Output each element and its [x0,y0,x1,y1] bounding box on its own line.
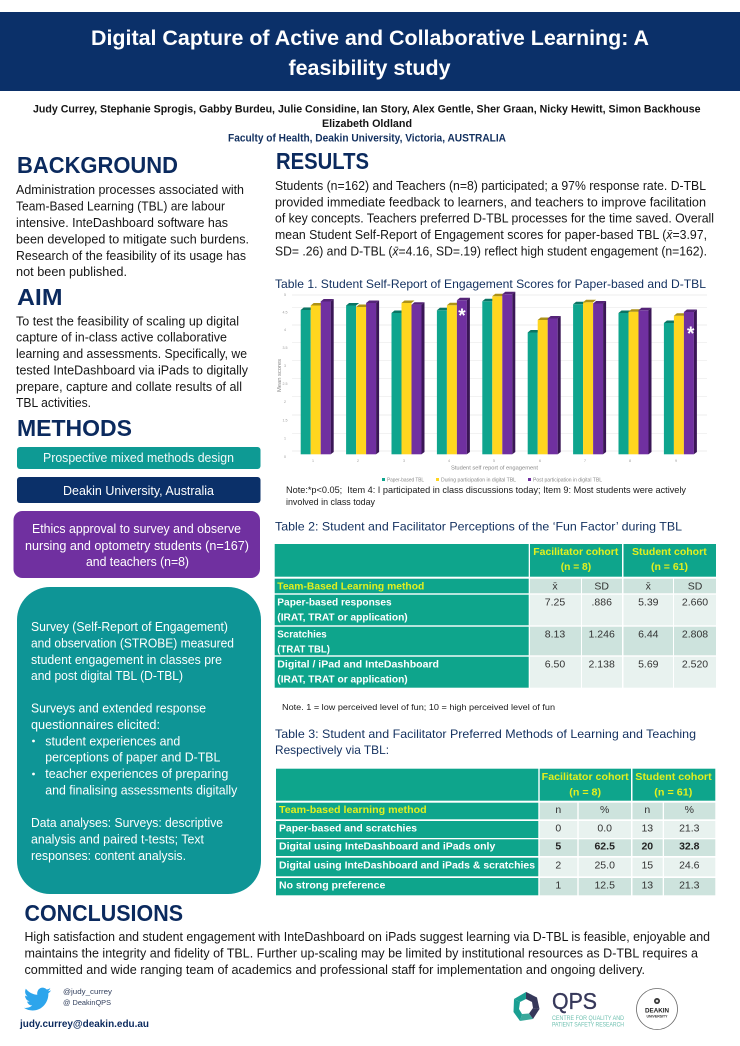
text block: results: provided immediate feedback to learners, and teachers to improve facilitation [275,196,706,210]
table 3 heading [275,727,696,757]
table 2: fun factor: 6.44 [638,629,659,641]
title banner: Digital Capture of Active and Collaborative Learning: A [91,27,649,50]
panel: survey methods: Survey (Self-Report of Engagement) [31,620,228,634]
text block: aim: capture of in-class active collaborative [16,331,227,345]
table 2: fun factor: SD [688,580,703,592]
table 2: fun factor: Scratchies [277,629,327,641]
title banner [0,12,740,91]
bar chart: engagement scores: During participation in digital TBL [441,478,516,484]
bar chart: engagement scores: 7 [584,459,586,463]
bar chart: engagement scores: 6 [539,459,541,463]
text block: conclusions: High satisfaction and student engagement with InteDashboard on iPads suggest learning via D-TBL is feasible, enjoyable and [24,930,710,944]
logo: QPS: PATIENT SAFETY RESEARCH [552,1022,624,1028]
heading: conclusions: CONCLUSIONS [24,900,183,926]
table 3: preferred methods: 12.5 [594,880,615,892]
text block: aim: tested InteDashboard via iPads to digitally [16,364,249,378]
bar chart: engagement scores: 3 [403,459,405,463]
table 2: fun factor: (IRAT, TRAT or application) [277,674,408,686]
panel: survey methods: questionnaires elicited: [31,718,160,732]
chart note: involved in class today [286,497,375,507]
table 3: preferred methods: 25.0 [594,859,615,871]
bar chart: engagement scores: 1 [284,436,286,440]
panel: survey methods: student experiences and [45,734,180,748]
table 2: fun factor: SD [594,580,609,592]
table 2 heading: Table 2: Student and Facilitator Perceptions of the ‘Fun Factor’ during TBL [275,520,682,534]
method box: ethics approval [14,511,260,578]
text block: conclusions: maintains the integrity and fidelity of TBL. Further up-scaling may be limited by institutional resources as D-TBL requires a [24,947,698,961]
method box: ethics approval: and teachers (n=8) [86,555,189,569]
panel: survey methods: Data analyses: Surveys: descriptive [31,816,223,830]
text block: results [275,179,714,258]
bar chart: engagement scores: 4.5 [282,310,288,314]
panel: survey methods: Surveys and extended response [31,702,206,716]
method box: location: Deakin University, Australia [63,484,214,498]
bar chart: engagement scores: 0 [284,455,286,459]
text block: background: Administration processes associated with [16,183,244,197]
table 3: preferred methods: 21.3 [679,822,700,834]
table 3: preferred methods: No strong preference [279,880,385,892]
logo: QPS: CENTRE FOR QUALITY AND [552,1015,624,1022]
bar chart: engagement scores: 4 [448,459,450,463]
table 2: fun factor: 2.808 [682,629,708,641]
table 3: preferred methods: 1 [555,880,561,892]
panel: survey methods: teacher experiences of preparing [45,767,228,781]
text block: results: of key concepts. Teachers preferred D-TBL processes for the time saved. Overall [275,212,714,226]
twitter handles: @ DeakinQPS [63,998,111,1007]
bar chart: engagement scores: * [458,306,466,327]
table 2: fun factor: Facilitator cohort [533,546,619,558]
bar chart: engagement scores: 1 [312,459,314,463]
authors and affiliation: Elizabeth Oldland [322,118,412,130]
table 2: fun factor: Student cohort [632,546,707,558]
method box: ethics approval: nursing and optometry students (n=167) [25,539,249,553]
table 3: preferred methods: 62.5 [594,841,615,853]
table 3: preferred methods: 13 [641,880,653,892]
table 3: preferred methods: 2 [555,859,561,871]
panel: survey methods: and observation (STROBE) measured [31,636,234,650]
table 3: preferred methods: n [555,804,561,816]
heading: background: BACKGROUND [17,152,178,178]
panel: survey methods: and post digital TBL (D-TBL) [31,669,183,683]
bar chart: engagement scores: 4 [284,328,286,332]
logo: Deakin University: DEAKIN [645,1008,669,1014]
table 3: preferred methods [276,769,715,895]
method box: location [17,477,260,503]
table 3: preferred methods: (n = 61) [654,786,692,798]
table 2: fun factor: x̄ [646,580,652,592]
text block: results: mean Student Self-Report of Engagement scores for paper-based TBL (x̄=3.97, [275,228,707,242]
table 3: preferred methods: 5 [555,841,561,853]
table 3: preferred methods: 32.8 [679,841,700,853]
table 3: preferred methods: n [644,804,650,816]
table 2: fun factor: (n = 61) [651,561,688,573]
table 2: fun factor: 2.660 [682,597,708,609]
text block: aim: TBL activities. [16,396,91,410]
text block: conclusions: committed and wide ranging team of academics and professional staff for implementation and ongoing delivery. [24,963,645,977]
table 2: fun factor: 5.39 [638,597,659,609]
panel: survey methods: and finalising assessments digitally [45,783,238,797]
table 2: fun factor: Team-Based Learning method [277,580,424,592]
table 2: fun factor: 7.25 [545,597,565,609]
bar chart: engagement scores: 3.5 [282,346,288,350]
table 3: preferred methods: % [600,804,609,816]
icon: twitter bird [24,988,51,1010]
bar chart: engagement scores: 8 [629,459,631,463]
table 2: fun factor: (n = 8) [561,561,591,573]
text block: background [16,183,249,279]
text block: conclusions [24,930,710,977]
table 3: preferred methods: Digital using InteDashboard and iPads & scratchies [279,859,535,871]
table 3: preferred methods: 13 [641,822,653,834]
bar chart: engagement scores: 2.5 [282,382,288,386]
table 3: preferred methods: 0 [555,822,561,834]
text block: background: Team-Based Learning (TBL) are labour [16,200,225,214]
twitter handles [63,987,112,1007]
text block: background: Research of the feasibility of its usage has [16,249,246,263]
panel: survey methods [17,587,261,894]
bar chart: engagement scores: 2 [357,459,359,463]
bar chart: engagement scores: Mean scores [277,358,283,392]
text block: aim: learning and assessments. Specifically, we [16,347,247,361]
method box: design [17,447,260,469]
method box: ethics approval: Ethics approval to survey and observe [32,522,241,536]
logo: QPS: QPS [552,988,597,1014]
twitter handles: @judy_currey [63,987,112,996]
table 2: fun factor: 6.50 [545,659,565,671]
chart note: Note:*p<0.05; Item 4: I participated in class discussions today; Item 9: Most students were actively [286,485,686,495]
bar chart: engagement scores: 2 [284,400,286,404]
table 2: fun factor: Digital / iPad and InteDashboard [277,659,439,671]
table 3: preferred methods: Student cohort [635,771,712,783]
table 2: fun factor: 1.246 [589,629,615,641]
table 2: fun factor: Paper-based responses [277,597,392,609]
table 2: fun factor: 5.69 [638,659,659,671]
table 1 heading: Table 1. Student Self-Report of Engagement Scores for Paper-based and D-TBL [275,277,706,291]
text block: aim: To test the feasibility of scaling up digital [16,314,239,328]
table 2 note: Note. 1 = low perceived level of fun; 10 = high perceived level of fun [282,702,555,712]
table 3: preferred methods: Paper-based and scratchies [279,822,417,834]
text block: background: been developed to mitigate such burdens. [16,232,249,246]
table 3: preferred methods: (n = 8) [569,786,601,798]
table 2: fun factor: x̄ [552,580,558,592]
table 2: fun factor: (TRAT TBL) [277,644,330,656]
logo: Deakin University [636,988,678,1030]
table 3 heading: Table 3: Student and Facilitator Preferred Methods of Learning and Teaching [275,727,696,741]
table 3: preferred methods: % [685,804,694,816]
title banner: feasibility study [288,57,451,80]
table 2: fun factor: 2.138 [589,659,615,671]
table 2: fun factor: (IRAT, TRAT or application) [277,612,408,624]
text block: aim: prepare, capture and collate results of all [16,380,242,394]
table 2: fun factor: 2.520 [682,659,708,671]
bar chart: engagement scores: Paper-based TBL [387,478,424,484]
table 3: preferred methods: Team-based learning method [279,804,427,816]
text block: results: Students (n=162) and Teachers (n=8) participated; a 97% response rate. D-TBL [275,179,706,193]
logo: QPS [514,988,624,1028]
bar chart: engagement scores: 1.5 [282,418,288,422]
panel: survey methods: perceptions of paper and D-TBL [45,751,220,765]
bar chart: engagement scores: 5 [493,459,495,463]
table 2: fun factor: 8.13 [545,629,565,641]
panel: survey methods: responses: content analysis. [31,849,186,863]
table 3: preferred methods: 0.0 [597,822,612,834]
bar chart: engagement scores: * [687,324,695,345]
contact email: judy.currey@deakin.edu.au [19,1018,149,1030]
table 3: preferred methods: 15 [641,859,653,871]
table 3: preferred methods: Digital using InteDashboard and iPads only [279,841,495,853]
bar chart: engagement scores: Student self report of engagement [451,466,539,472]
text block: results: SD= .26) and D-TBL (x̄=4.16, SD=.19) reflect high student engagement (n=162). [275,244,707,258]
bar chart: engagement scores [277,292,707,484]
method box: design: Prospective mixed methods design [43,451,234,465]
panel: survey methods: analysis and paired t-tests; Text [31,833,204,847]
table 2: fun factor [275,544,716,688]
authors and affiliation: Judy Currey, Stephanie Sprogis, Gabby Burdeu, Julie Considine, Ian Story, Alex Gentle, Sher Graan, Nicky Hewitt, Simon Backhouse [33,104,700,116]
heading: results: RESULTS [276,148,369,174]
table 3: preferred methods: 20 [641,841,653,853]
table 3: preferred methods: 21.3 [679,880,700,892]
text block: background: not been published. [16,265,127,279]
heading: methods: METHODS [17,415,132,441]
table 2: fun factor: .886 [591,597,612,609]
bar chart: engagement scores: Post participation in digital TBL [533,478,602,484]
authors and affiliation: Faculty of Health, Deakin University, Victoria, AUSTRALIA [228,132,506,144]
table 3 heading: Respectively via TBL: [275,743,389,757]
bar chart: engagement scores: 5 [284,293,286,297]
authors and affiliation [33,104,700,144]
text block: aim [16,314,249,410]
logo: Deakin University: UNIVERSITY [646,1014,668,1018]
chart note [286,485,686,507]
bar chart: engagement scores: 3 [284,364,286,368]
panel: survey methods: student engagement in classes pre [31,653,222,667]
heading: aim: AIM [17,284,62,310]
table 3: preferred methods: Facilitator cohort [542,771,629,783]
bar chart: engagement scores: 9 [675,459,677,463]
table 3: preferred methods: 24.6 [679,859,700,871]
text block: background: intensive. InteDashboard software has [16,216,228,230]
